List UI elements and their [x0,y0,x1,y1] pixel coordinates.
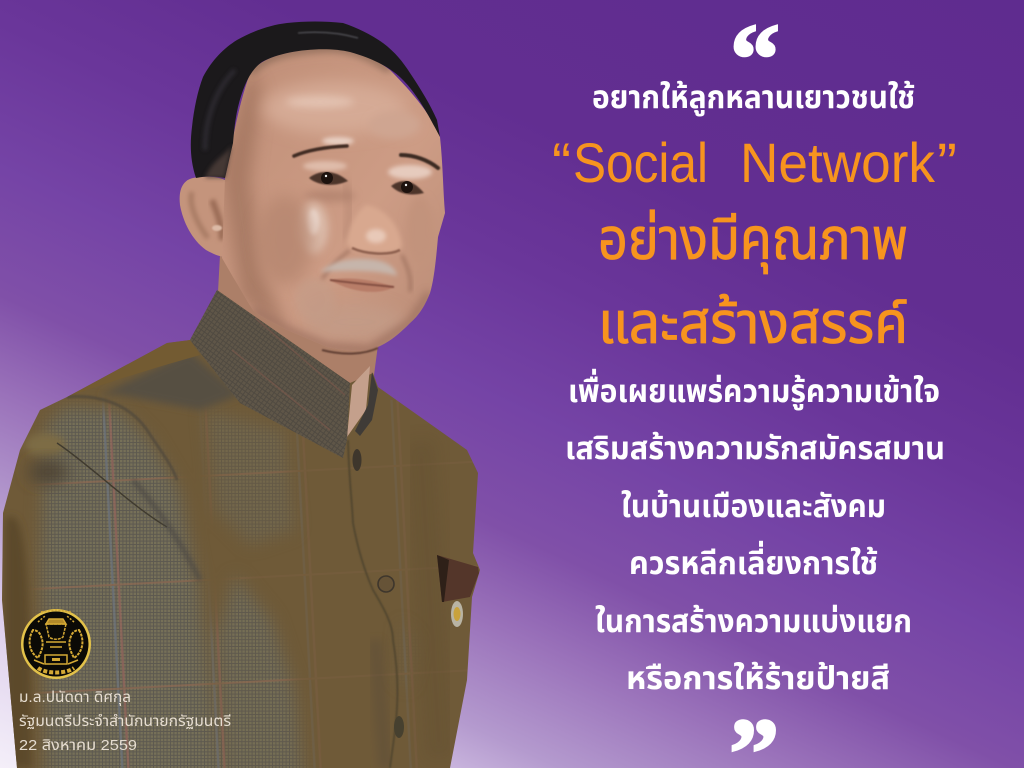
hair [191,22,440,178]
highlight: Social Network: ” [937,131,957,194]
line 6: เสริมสร้างความรักสมัครสมาน [565,430,945,466]
pocket square [437,555,479,602]
inner shirt opening [347,366,370,437]
jacket body [0,280,490,768]
line 1: อยากให้ลูกหลานเยาวชนใช้ [592,79,915,116]
eyebrows [294,146,438,168]
line 7: ในบ้านเมืองและสังคม [621,488,886,524]
highlight: creative: และสร้างสรรค์ [598,291,908,356]
eyes [309,172,424,195]
line 5: เพื่อเผยแพร่ความรู้ความเข้าใจ [568,368,940,410]
line 10: หรือการให้ร้ายป้ายสี [626,660,890,696]
jacket collar [190,290,350,458]
facial shading and highlights [222,48,434,350]
faint stripes on brown cloth [296,400,412,768]
highlight: Social Network [552,131,957,194]
caption: name, position, date: รัฐมนตรีประจำสำนักนายกรัฐมนตรี [19,713,231,730]
moustache [320,259,397,276]
shading [5,516,32,768]
face [222,48,445,351]
quote text [552,79,957,696]
mouth [330,278,394,292]
highlight: quality: อย่างมีคุณภาพ [598,207,908,274]
highlight: Social Network: Network [740,131,936,194]
ear [180,177,236,257]
caption: name, position, date [19,689,231,754]
seal detail [30,610,82,672]
caption: name, position, date: ม.ล.ปนัดดา ดิศกุล [19,689,131,706]
seams [57,443,167,527]
line 8: ควรหลีกเลี่ยงการใช้ [629,540,878,581]
highlight: Social Network: Social [573,131,708,194]
jacket buttons [352,449,404,738]
highlight: Social Network: “ [552,131,571,194]
neck [218,255,378,437]
line 9: ในการสร้างความแบ่งแยก [595,603,912,639]
plaid fabric [36,402,306,768]
lapel pin [451,601,463,627]
caption: name, position, date: 22 สิงหาคม 2559 [19,737,137,754]
emblem: government seal [21,609,91,679]
portrait: man in brown plaid jacket [0,22,490,768]
jaw shadow line [322,348,378,354]
nose [347,205,402,254]
inner collar right side [355,372,378,436]
